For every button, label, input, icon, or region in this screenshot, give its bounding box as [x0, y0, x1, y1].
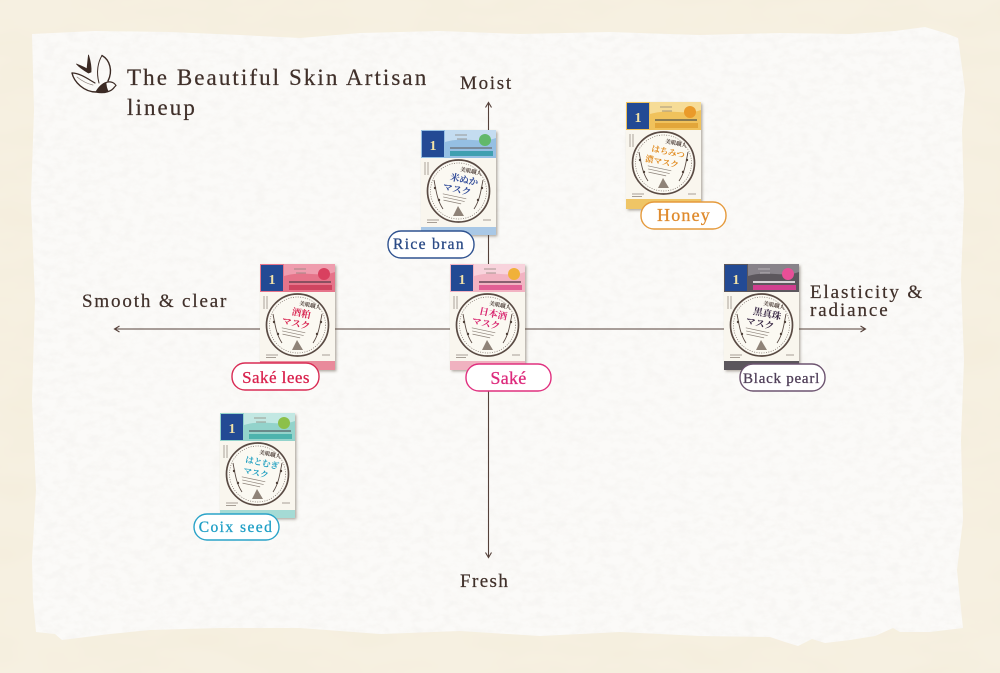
product: Rice bran: 1 [430, 139, 436, 154]
product: Saké lees: マスク [281, 313, 312, 333]
label: Saké: Saké [490, 368, 527, 388]
product: Honey: 美肌職人 [665, 137, 688, 150]
product: Honey [626, 102, 701, 209]
axis label: Moist: Moist [460, 73, 513, 94]
product: Saké: マスク [471, 313, 502, 333]
axis label: Smooth & clear: Smooth & clear [82, 291, 228, 312]
product: Saké lees: 美肌職人 [299, 299, 322, 312]
axis: horizontal arrow [114, 326, 866, 332]
product: Black pearl: 美肌職人 [763, 299, 786, 312]
product: Rice bran: マスク [442, 179, 473, 199]
title: lineup [127, 95, 197, 120]
product: Coix seed: 美肌職人 [259, 448, 282, 461]
product: Saké [450, 264, 525, 370]
product: Honey: 濃マスク [644, 152, 680, 171]
label: Honey: Honey [657, 205, 711, 225]
product: Saké: 1 [458, 273, 466, 288]
label: Saké [466, 364, 551, 391]
product: Coix seed: はとむぎ [244, 453, 281, 472]
label: Black pearl [740, 364, 825, 391]
label: Honey [641, 202, 726, 229]
title: The Beautiful Skin Artisan [127, 65, 428, 90]
product: Rice bran [421, 130, 496, 235]
axis: vertical arrow [486, 102, 492, 558]
label: Saké lees [232, 363, 319, 390]
product: Saké: 美肌職人 [489, 299, 512, 312]
axis label: Fresh: Fresh [460, 571, 509, 592]
axis label: Elasticity & radiance: radiance [810, 300, 890, 321]
label: Coix seed: Coix seed [199, 519, 273, 536]
product: Saké lees: 酒粕 [291, 304, 313, 321]
product: Saké lees [260, 264, 335, 370]
label: Black pearl: Black pearl [743, 371, 820, 387]
product: Honey: 1 [634, 111, 642, 126]
product: Saké: 日本酒 [478, 303, 509, 323]
icon: swallow [72, 55, 116, 93]
product: Black pearl: マスク [745, 313, 776, 333]
label: Coix seed [194, 514, 279, 540]
product: Black pearl: 1 [732, 273, 740, 288]
label: Rice bran [388, 231, 474, 258]
axis label: Elasticity & radiance: Elasticity & [810, 282, 924, 303]
product: Coix seed: 1 [228, 422, 236, 437]
product: Coix seed: マスク [242, 464, 270, 481]
product: Black pearl: 黒真珠 [752, 303, 783, 323]
label: Rice bran: Rice bran [393, 236, 465, 253]
product: Rice bran: 米ぬか [449, 169, 480, 189]
label: Saké lees: Saké lees [242, 368, 310, 387]
product: Black pearl [724, 264, 799, 370]
product: Rice bran: 美肌職人 [460, 165, 483, 178]
product: Saké lees: 1 [268, 273, 276, 288]
product: Honey: はちみつ [650, 142, 686, 161]
product: Coix seed [220, 413, 295, 518]
